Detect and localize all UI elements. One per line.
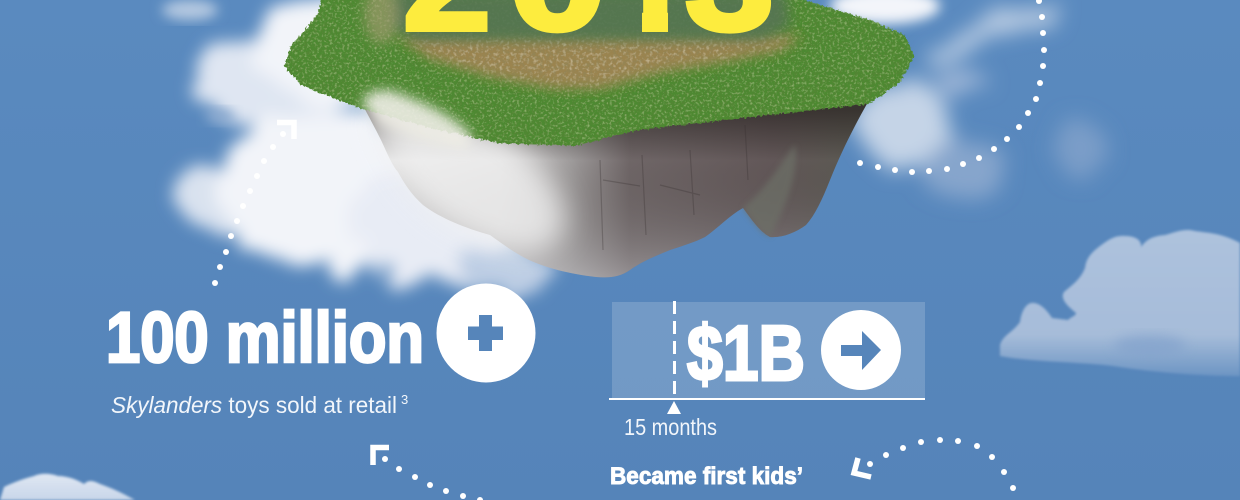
stat caption: Skylanders toys sold at retail [111, 392, 397, 418]
cloud: lower right [1000, 230, 1240, 376]
dotted arrow: lower right [854, 437, 1016, 491]
island mist on grass [362, 90, 472, 150]
island tan patch left [364, 0, 400, 44]
timeline axis [609, 398, 925, 400]
dotted arrow: lower left [373, 448, 483, 500]
island shaded hill behind title [390, 0, 790, 40]
floating island [284, 0, 914, 277]
stat: $1B timeline [609, 301, 925, 490]
island dirt clearing [398, 36, 802, 88]
timeline band [612, 302, 925, 398]
marker triangle [667, 401, 681, 414]
icon: plus in circle [436, 284, 536, 382]
island rock underside [360, 100, 869, 277]
cloud: bottom left [0, 474, 135, 500]
island grass top [284, 0, 914, 146]
dotted arrow: up to island [212, 122, 294, 286]
cloud: large white cloud behind island [162, 0, 547, 290]
timeline label: 15 months [624, 414, 717, 440]
cloud: wispy cloud upper right [830, 0, 1106, 198]
dotted line: right of island [857, 0, 1047, 175]
title year [406, 0, 772, 34]
footnote marker: 3 [401, 392, 408, 407]
stat number: 100 million [106, 299, 424, 378]
stat: 100 million toys [106, 284, 536, 418]
stat number: $1B [687, 309, 805, 397]
stat caption heading: Became first kids’ [610, 463, 803, 490]
dashed marker [673, 301, 676, 398]
icon: arrow in circle [821, 310, 901, 390]
cloud shadow patch [1114, 335, 1186, 357]
